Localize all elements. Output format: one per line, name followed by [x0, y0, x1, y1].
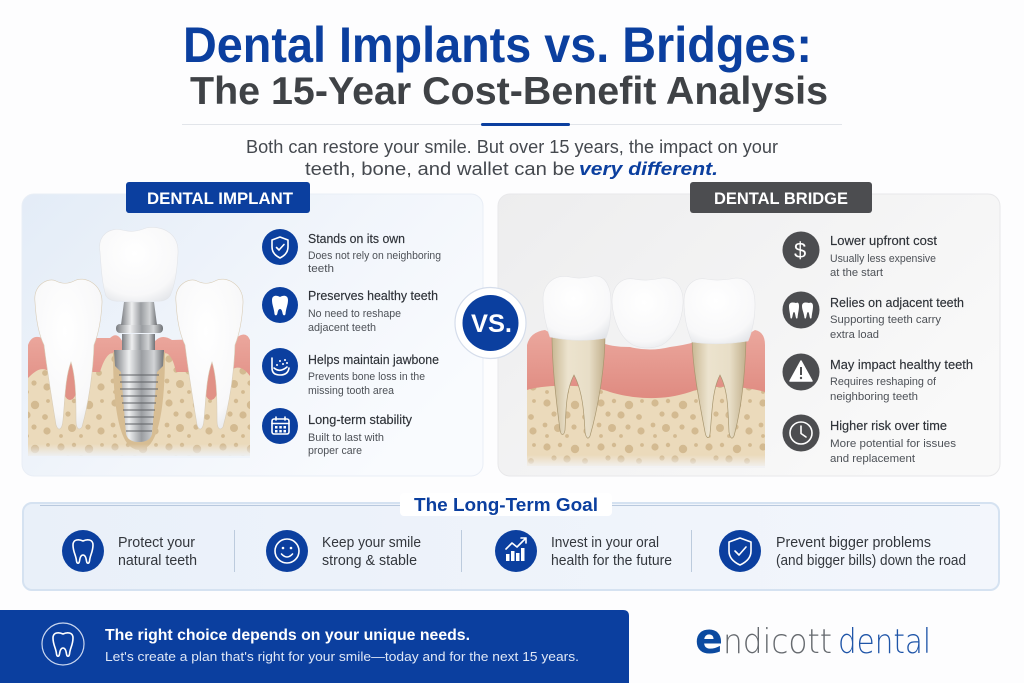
footer tooth icon: [42, 623, 84, 665]
goal: protect your natural teeth: natural teeth: [118, 553, 197, 569]
goal top rule: [40, 505, 980, 506]
logo: endicott dental: ndicott: [723, 622, 832, 662]
subtitle: very different.: [579, 159, 718, 179]
subtitle: teeth, bone, and wallet can be: [305, 159, 575, 179]
bridge point: relies on adjacent teeth: Relies on adjacent teeth: [830, 295, 964, 310]
bridge point: higher risk over time: More potential for issues: [830, 438, 956, 450]
logo: endicott dental: e: [695, 614, 723, 663]
implant benefit: long-term stability: proper care: [308, 445, 362, 457]
title: [183, 17, 828, 113]
bridge point: relies on adjacent teeth: extra load: [830, 329, 879, 341]
bridge point: higher risk over time: and replacement: [830, 453, 916, 465]
implant benefit: long-term stability: Long-term stability: [308, 412, 412, 427]
footer message: [105, 627, 579, 664]
bridge point: lower upfront cost: at the start: [830, 267, 884, 279]
title divider: [182, 123, 842, 126]
goal: prevent bigger problems: Prevent bigger problems: [776, 535, 931, 551]
bridge point: may impact healthy teeth: May impact healthy teeth: [830, 357, 973, 372]
bridge point: may impact healthy teeth: Requires reshaping of: [830, 376, 937, 388]
implant benefit: stands on its own: teeth: [308, 263, 334, 275]
goal: keep your smile strong and stable: [266, 530, 421, 572]
implant benefit: preserves healthy teeth: No need to reshape: [308, 308, 401, 320]
panel: dental implant: [22, 182, 483, 476]
bridge point: higher risk over time: Higher risk over time: [830, 418, 947, 433]
implant benefit: long-term stability: [262, 408, 412, 457]
goal: prevent bigger problems: (and bigger bills) down the road: [776, 553, 966, 569]
title: Dental Implants vs. Bridges:: [183, 17, 812, 73]
title: The 15-Year Cost-Benefit Analysis: [190, 70, 828, 113]
bridge badge: DENTAL BRIDGE: [714, 189, 848, 208]
bridge point: may impact healthy teeth: neighboring teeth: [830, 391, 918, 403]
implant benefit: helps maintain jawbone: [262, 348, 439, 397]
implant illustration: [28, 227, 250, 458]
implant benefit: stands on its own: [262, 229, 441, 275]
goal: invest in your oral health: Invest in your oral: [551, 535, 659, 551]
footer message: Let's create a plan that's right for your smile—today and for the next 15 years.: [105, 649, 579, 664]
implant benefit: preserves healthy teeth: adjacent teeth: [308, 322, 376, 334]
right abutment root: [692, 340, 746, 438]
implant benefit: long-term stability: Built to last with: [308, 432, 384, 444]
goal: protect your natural teeth: [62, 530, 197, 572]
vs badge: VS.: [471, 310, 512, 338]
goal: protect your natural teeth: Protect your: [118, 535, 195, 551]
bridge crowns: [543, 276, 755, 348]
implant badge: [126, 182, 310, 213]
bridge point: lower upfront cost: [782, 232, 937, 279]
footer message: The right choice depends on your unique needs.: [105, 627, 470, 644]
implant benefit: helps maintain jawbone: Helps maintain jawbone: [308, 352, 439, 367]
panel: dental bridge: [498, 182, 1000, 476]
goal: keep your smile strong and stable: strong & stable: [322, 553, 417, 569]
bridge point: lower upfront cost: Lower upfront cost: [830, 233, 937, 248]
goal: invest in your oral health: health for the future: [551, 553, 672, 569]
implant benefit: helps maintain jawbone: Prevents bone loss in the: [308, 371, 425, 383]
implant benefit: preserves healthy teeth: [262, 287, 438, 334]
subtitle: [246, 137, 778, 179]
logo: endicott dental: dental: [838, 622, 931, 662]
implant benefit: stands on its own: Does not rely on neighboring: [308, 250, 441, 262]
bridge point: may impact healthy teeth: [782, 354, 973, 403]
implant screw: [114, 302, 164, 442]
goal: invest in your oral health: [495, 530, 672, 572]
goal: keep your smile strong and stable: Keep your smile: [322, 535, 421, 551]
bridge badge: [690, 182, 872, 213]
logo: endicott dental: [695, 614, 931, 663]
bridge point: relies on adjacent teeth: [782, 292, 964, 341]
goal heading: The Long-Term Goal: [414, 495, 598, 515]
bridge point: lower upfront cost: $: [794, 238, 806, 263]
left abutment root: [552, 335, 605, 438]
implant benefit: preserves healthy teeth: Preserves healthy teeth: [308, 288, 438, 303]
bridge point: higher risk over time: [782, 414, 956, 465]
subtitle: Both can restore your smile. But over 15 years, the impact on your: [246, 137, 778, 157]
footer banner: [0, 610, 629, 683]
implant badge: DENTAL IMPLANT: [147, 189, 294, 208]
goal: prevent bigger problems: [719, 530, 966, 572]
bridge point: relies on adjacent teeth: Supporting teeth carry: [830, 314, 941, 326]
bridge illustration: [527, 276, 765, 468]
implant benefit: helps maintain jawbone: missing tooth area: [308, 385, 395, 397]
bridge point: lower upfront cost: Usually less expensive: [830, 253, 936, 265]
implant benefit: stands on its own: Stands on its own: [308, 231, 405, 246]
panel: the long-term goal: [23, 493, 999, 590]
implant crown: [100, 227, 178, 302]
vs badge: [455, 288, 526, 358]
